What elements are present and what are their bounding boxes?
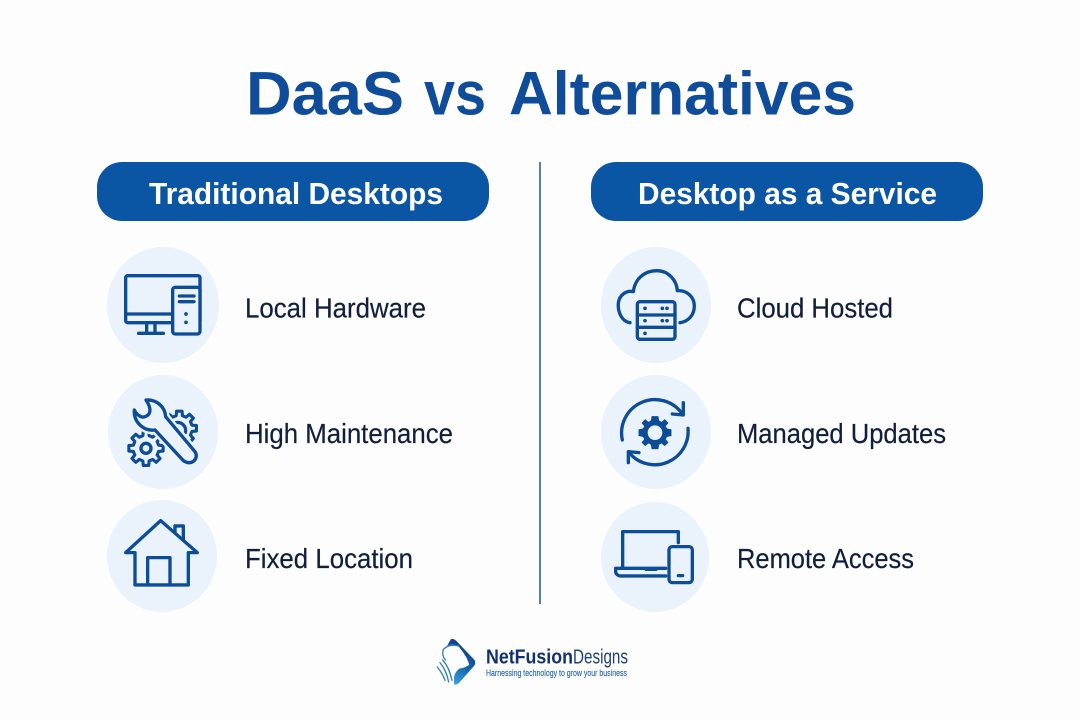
- title: vs: [424, 60, 486, 128]
- icon: laptop and phone: [601, 502, 709, 612]
- label: Remote Access: [737, 543, 914, 574]
- label: Fixed Location: [245, 543, 413, 574]
- panel: traditional desktops: [97, 162, 489, 612]
- icon: sync gear: [601, 375, 711, 489]
- row: cloud hosted: [601, 247, 893, 363]
- label: Cloud Hosted: [737, 292, 893, 324]
- row: remote access: [601, 502, 914, 612]
- icon: desktop computer: [107, 247, 219, 363]
- title: [246, 60, 856, 128]
- tagline: Harnessing technology to grow your business: [486, 668, 627, 678]
- icon: wrench and gears: [108, 375, 218, 489]
- heading pill: Traditional Desktops: [97, 162, 489, 221]
- row: local hardware: [107, 247, 426, 363]
- row: managed updates: [601, 375, 946, 489]
- divider: [539, 162, 541, 604]
- row: high maintenance: [108, 375, 453, 489]
- logo mark: [436, 639, 475, 687]
- heading pill: Traditional Desktops: Traditional Desktops: [149, 176, 443, 211]
- icon: cloud server: [601, 247, 711, 363]
- label: Managed Updates: [737, 418, 946, 449]
- panel: desktop as a service: [591, 162, 983, 612]
- label: Local Hardware: [245, 292, 426, 324]
- title: Alternatives: [509, 60, 856, 128]
- icon: house: [107, 500, 217, 612]
- logo: NetFusion Designs: Designs: [573, 646, 628, 668]
- label: High Maintenance: [245, 418, 453, 449]
- heading pill: Desktop as a Service: [591, 162, 983, 221]
- heading pill: Desktop as a Service: Desktop as a Service: [638, 176, 937, 211]
- wordmark: NetFusion: [486, 646, 573, 668]
- row: fixed location: [107, 500, 413, 612]
- title: DaaS: [246, 60, 404, 128]
- logo: NetFusion Designs: [436, 639, 628, 687]
